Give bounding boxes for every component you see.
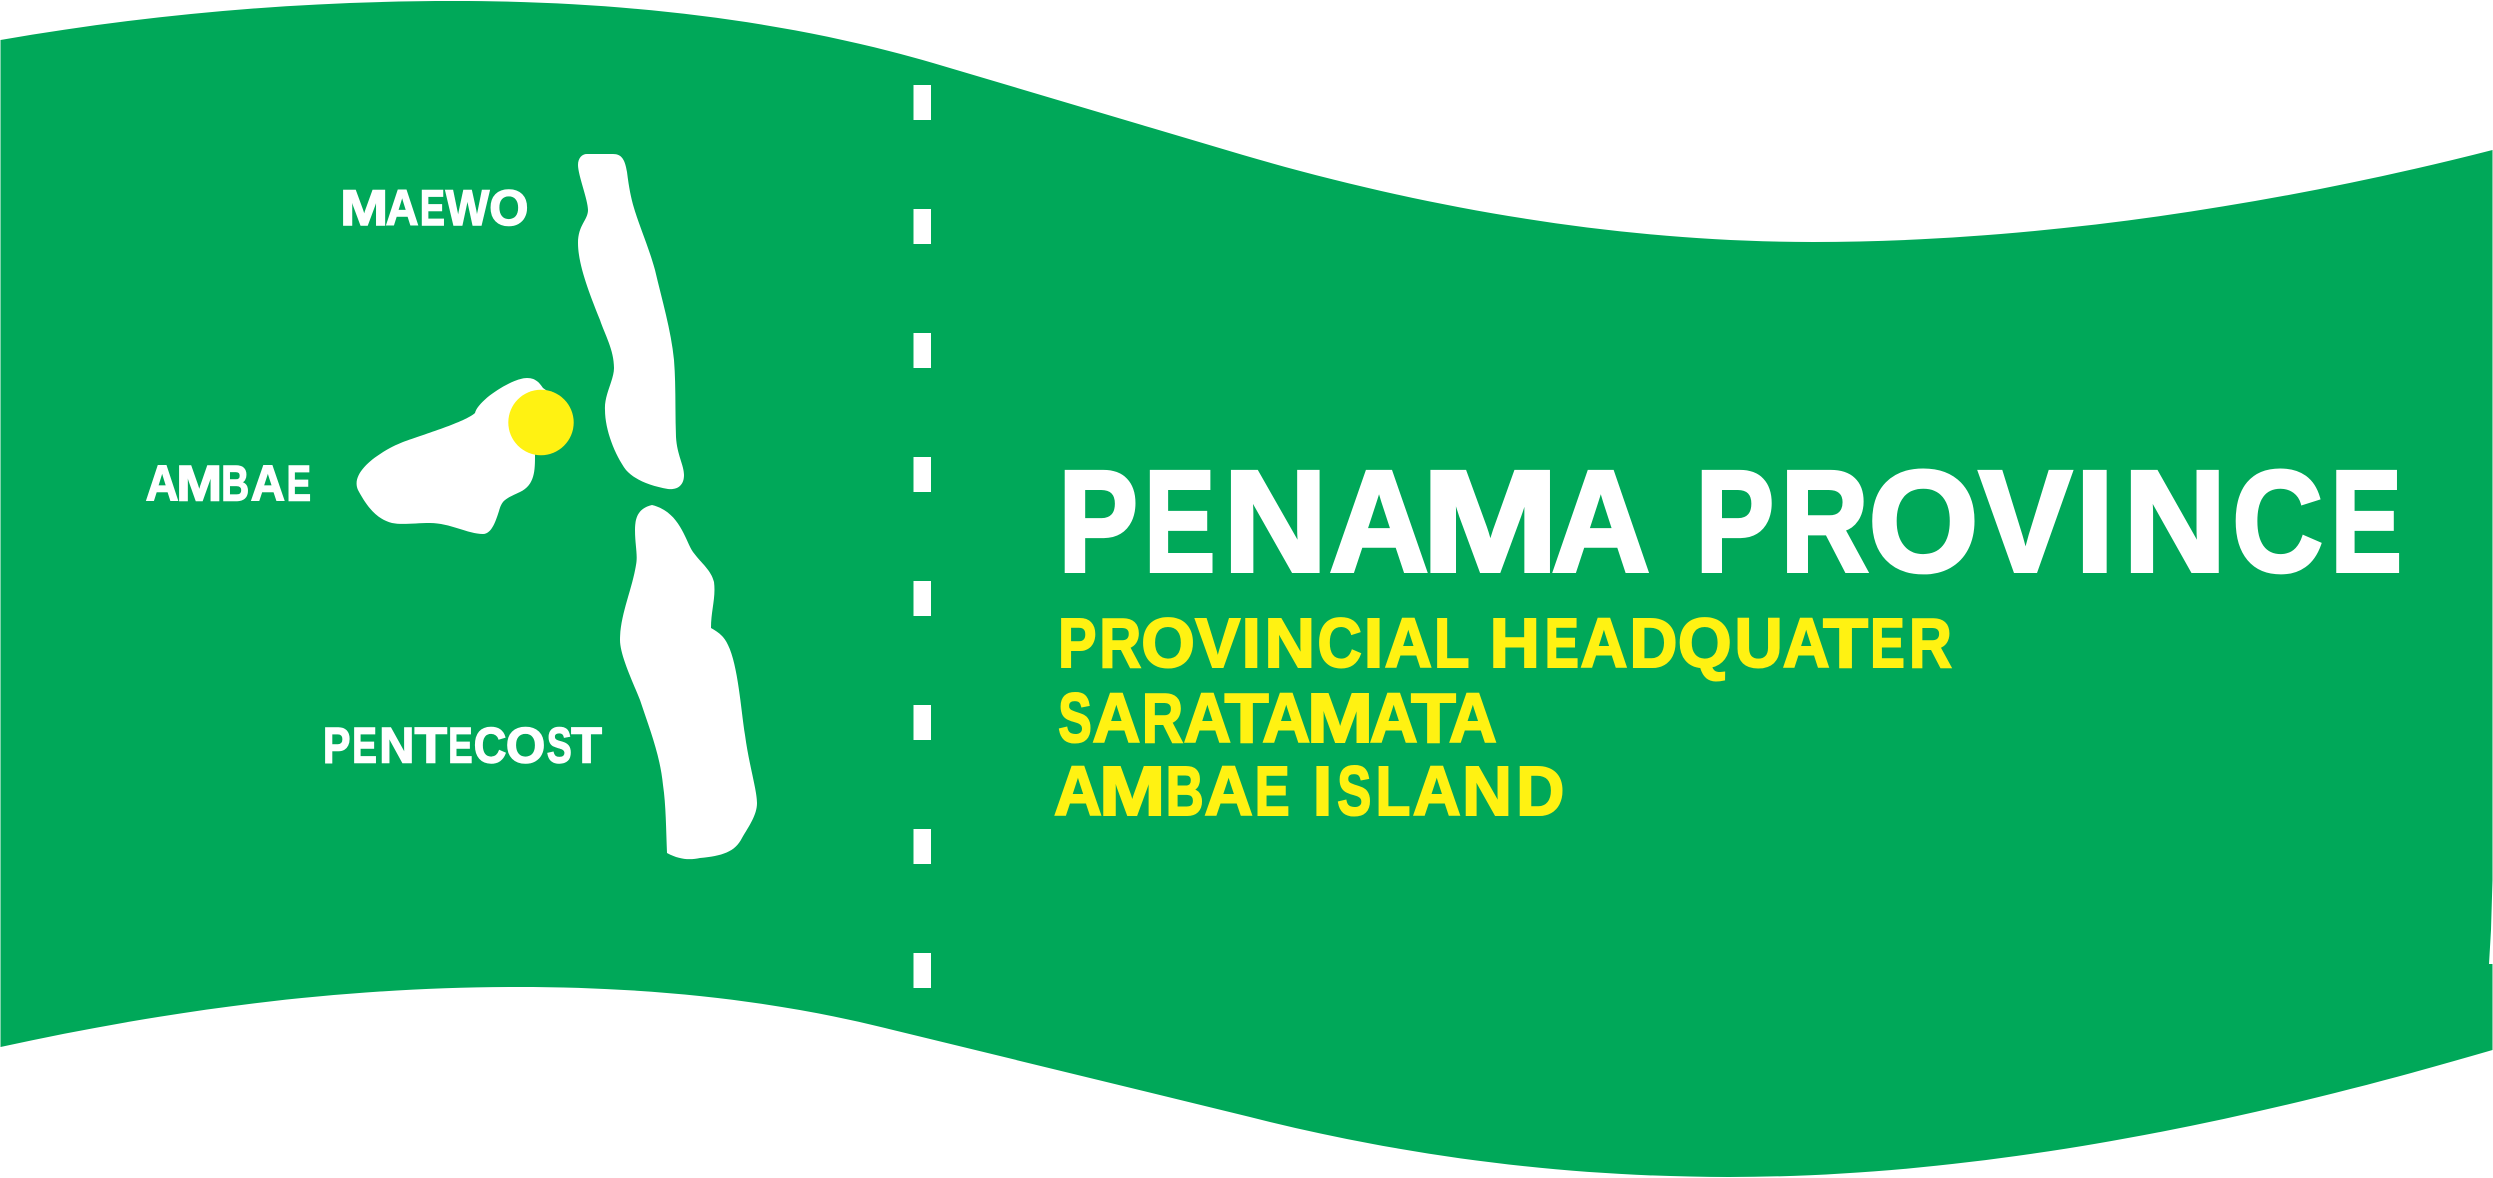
line: ambae island: A <box>1204 752 1253 830</box>
title: PENAMA PROVINCE: P <box>1696 441 1774 602</box>
label: AMBAE: E <box>287 455 311 511</box>
label: AMBAE: B <box>221 455 249 511</box>
line: provincial headquater: L <box>1434 604 1469 682</box>
island: Pentecost <box>620 505 757 859</box>
line: saratamata: A <box>1449 679 1497 757</box>
line: saratamata: T <box>1225 679 1269 757</box>
line: provincial headquater: V <box>1195 604 1240 682</box>
line: provincial headquater: P <box>1058 604 1096 682</box>
line: provincial headquater: T <box>1823 604 1868 682</box>
label: PENTECOST: S <box>547 717 572 773</box>
line: ambae island: L <box>1376 752 1410 830</box>
line: provincial headquater: N <box>1264 604 1315 682</box>
line: ambae island: M <box>1099 752 1165 830</box>
line: provincial headquater: C <box>1318 604 1362 682</box>
line: saratamata: A <box>1184 679 1231 757</box>
title: PENAMA PROVINCE: I <box>2076 441 2114 602</box>
text block: headquarters address <box>1054 604 1952 830</box>
line: provincial headquater: I <box>1364 604 1383 682</box>
line: ambae island: A <box>1413 752 1461 830</box>
title: PENAMA PROVINCE: C <box>2232 441 2323 602</box>
label: PENTECOST: E <box>352 717 377 773</box>
line: provincial headquater: A <box>1580 604 1628 682</box>
title: PENAMA PROVINCE: M <box>1422 441 1559 602</box>
line: provincial headquater: E <box>1870 604 1905 682</box>
label: MAEWO: W <box>446 180 490 236</box>
line: saratamata: M <box>1307 679 1373 757</box>
island: Maewo <box>578 154 684 489</box>
line: ambae island: E <box>1255 752 1290 830</box>
line: provincial headquater: D <box>1630 604 1677 682</box>
label: AMBAE: M <box>176 455 222 511</box>
line: saratamata: A <box>1370 679 1418 757</box>
title: PENAMA PROVINCE: V <box>1979 441 2072 602</box>
headquarters marker: yellow dot <box>508 390 574 455</box>
label: PENTECOST: T <box>415 717 447 773</box>
line: ambae island: N <box>1462 752 1512 830</box>
line: provincial headquater: R <box>1099 604 1141 682</box>
label: PENTECOST: E <box>448 717 473 773</box>
line: provincial headquater: E <box>1545 604 1579 682</box>
label: PENTECOST: O <box>506 717 545 773</box>
title: PENAMA PROVINCE: R <box>1781 441 1869 602</box>
line: provincial headquater: Q <box>1678 604 1732 682</box>
title: PENAMA PROVINCE: A <box>1552 441 1650 602</box>
label: MAEWO: A <box>386 180 419 236</box>
line: saratamata: T <box>1411 679 1456 757</box>
line: provincial headquater: O <box>1141 604 1195 682</box>
title: PENAMA PROVINCE: A <box>1329 441 1429 602</box>
island: Ambae <box>357 378 560 534</box>
title: PENAMA PROVINCE: O <box>1868 441 1978 602</box>
label: PENTECOST: N <box>379 717 414 773</box>
line: ambae island: I <box>1313 752 1332 830</box>
dashed divider <box>914 85 931 988</box>
map: islands of Penama <box>357 154 757 859</box>
line: saratamata: R <box>1142 679 1183 757</box>
title: PENAMA PROVINCE: N <box>1223 441 1327 602</box>
label: AMBAE: A <box>251 455 285 511</box>
title: PENAMA PROVINCE: P <box>1058 441 1138 602</box>
title: PENAMA PROVINCE: E <box>2331 441 2402 602</box>
line: saratamata: S <box>1058 679 1092 757</box>
title: PENAMA PROVINCE: N <box>2123 441 2226 602</box>
line: ambae island: S <box>1337 752 1371 830</box>
line: ambae island: D <box>1516 752 1564 830</box>
line: ambae island: A <box>1054 752 1102 830</box>
line: provincial headquater: I <box>1242 604 1261 682</box>
line: provincial headquater: A <box>1385 604 1432 682</box>
label: AMBAE: A <box>146 455 179 511</box>
line: saratamata: A <box>1092 679 1140 757</box>
line: provincial headquater: R <box>1909 604 1952 682</box>
label: PENTECOST: C <box>474 717 506 773</box>
label: MAEWO: M <box>340 180 388 236</box>
title: PENAMA PROVINCE: E <box>1144 441 1215 602</box>
label: PENTECOST: P <box>323 717 350 773</box>
line: provincial headquater: A <box>1783 604 1830 682</box>
line: provincial headquater: U <box>1734 604 1783 682</box>
line: provincial headquater: H <box>1490 604 1540 682</box>
line: saratamata: A <box>1262 679 1310 757</box>
label: PENTECOST: T <box>571 717 602 773</box>
label: MAEWO: E <box>420 180 445 236</box>
label: MAEWO: O <box>489 180 528 236</box>
line: ambae island: B <box>1166 752 1204 830</box>
